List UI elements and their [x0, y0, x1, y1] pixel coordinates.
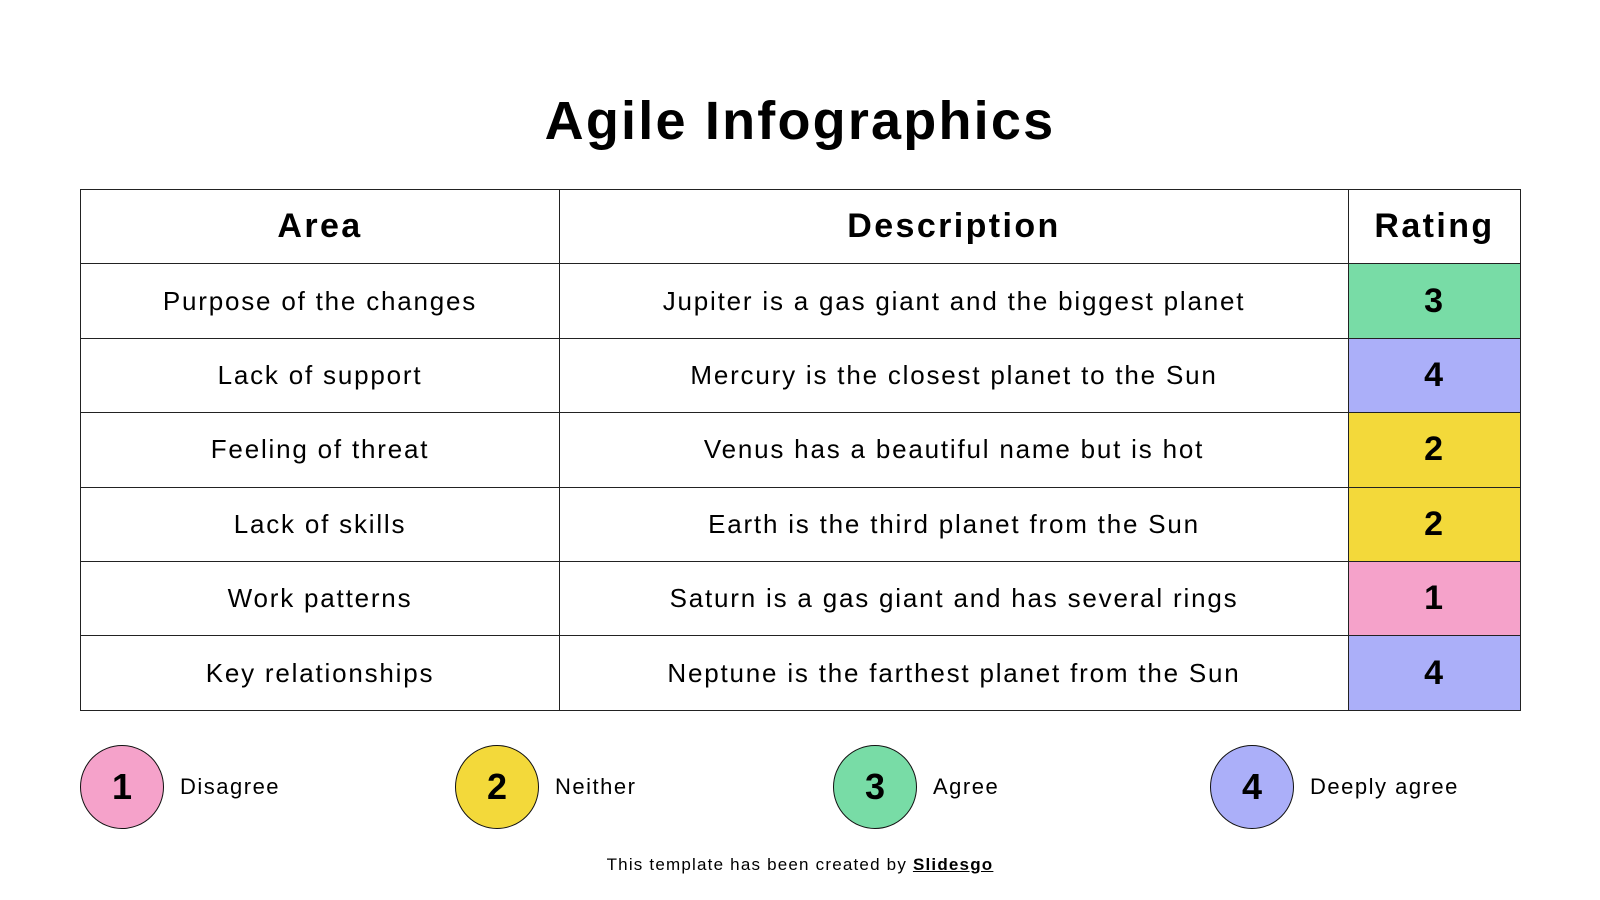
- legend: disagree: [80, 745, 280, 829]
- table: Saturn is a gas giant and has several rings: [670, 583, 1238, 613]
- legend: disagree: 1: [112, 766, 132, 807]
- table: Purpose of the changes: [163, 286, 477, 316]
- legend: neither: Neither: [555, 774, 636, 799]
- legend: neither: [455, 745, 636, 829]
- table: Lack of skills: [234, 509, 406, 539]
- legend: neither: 2: [487, 766, 507, 807]
- table: 4: [1424, 356, 1445, 394]
- table: Venus has a beautiful name but is hot: [704, 434, 1204, 464]
- table: 2: [1424, 430, 1445, 468]
- table: Work patterns: [228, 583, 412, 613]
- legend: agree: [833, 745, 999, 829]
- table: 2: [1424, 505, 1445, 543]
- table: 3: [1424, 282, 1445, 320]
- legend: deeply agree: Deeply agree: [1310, 774, 1459, 799]
- table: Mercury is the closest planet to the Sun: [690, 360, 1218, 390]
- title: Agile Infographics: [545, 91, 1055, 151]
- table: 4: [1424, 654, 1445, 692]
- legend: agree: 3: [865, 766, 885, 807]
- table: Lack of support: [218, 360, 422, 390]
- table: Rating: [1374, 207, 1495, 245]
- footer credit: This template has been created by Slidesgo: [607, 855, 993, 874]
- legend: disagree: Disagree: [180, 774, 280, 799]
- table: Feeling of threat: [211, 434, 429, 464]
- table: Area: [277, 207, 363, 245]
- table: [80, 189, 1521, 711]
- table: Description: [847, 207, 1061, 245]
- table: Key relationships: [206, 658, 434, 688]
- table: Jupiter is a gas giant and the biggest planet: [663, 286, 1245, 316]
- legend: agree: Agree: [933, 774, 999, 799]
- table: Neptune is the farthest planet from the Sun: [667, 658, 1241, 688]
- table: Earth is the third planet from the Sun: [708, 509, 1200, 539]
- table: 1: [1424, 579, 1445, 617]
- legend: deeply agree: 4: [1242, 766, 1262, 807]
- legend: deeply agree: [1210, 745, 1459, 829]
